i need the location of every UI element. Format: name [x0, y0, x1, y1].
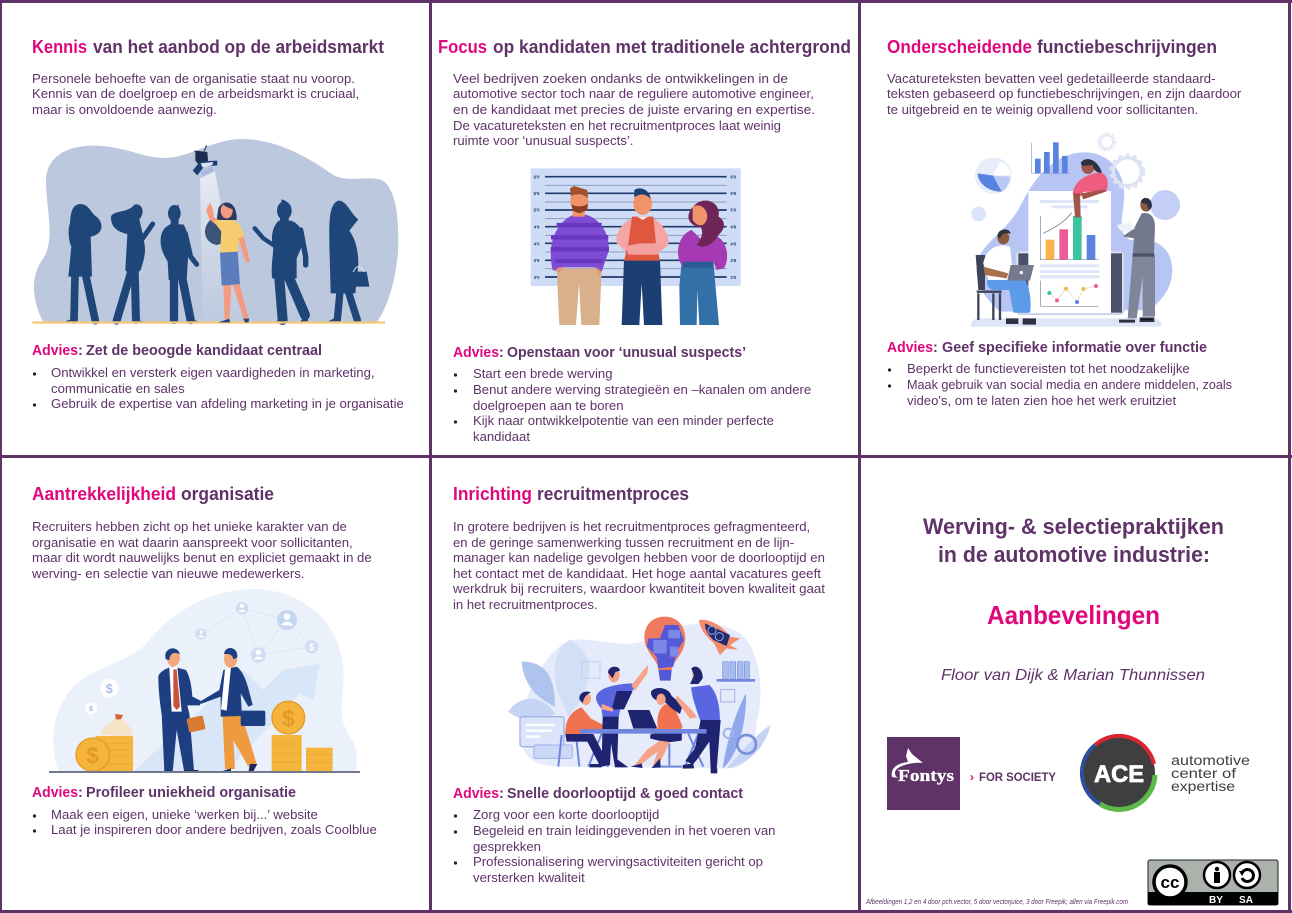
logo: automotive center of expertise: center of — [1171, 765, 1236, 781]
advice list: focus: Benut andere werving strategieën en –kanalen om andere — [473, 382, 811, 397]
advice list: onderscheidende: Beperkt de functievereisten tot het noodzakelijke — [907, 361, 1190, 376]
heading: inrichting — [453, 484, 689, 504]
heading: aantrekkelijkheid: Aantrekkelijkheid — [32, 484, 176, 504]
panel: inrichting recruitmentproces — [452, 484, 825, 885]
heading: onderscheidende — [887, 37, 1217, 57]
advice list: onderscheidende: Maak gebruik van social media en andere middelen, zoals — [907, 377, 1232, 392]
advice heading: kennis: : — [78, 343, 83, 359]
advice heading: focus: Advies — [453, 345, 499, 361]
illustration: team around a table with lightbulb puzzle — [508, 617, 771, 773]
advice list: inrichting: Begeleid en train leidinggevenden in het voeren van — [473, 823, 775, 838]
advice list: onderscheidende — [888, 361, 1232, 408]
text block: inrichting intro: het contact met de kandidaat. Het hoge aantal vacatures geeft — [453, 566, 821, 581]
advice list: kennis: Gebruik de expertise van afdeling marketing in je organisatie — [51, 396, 404, 411]
illustration: police line-up of three people: 4'0 — [534, 241, 540, 246]
logo text: for society: FOR SOCIETY — [979, 770, 1056, 784]
panel: onderscheidende functiebeschrijvingen — [887, 37, 1242, 408]
title — [923, 514, 1224, 567]
illustration: business handshake with coins: $ — [282, 706, 295, 732]
advice heading: aantrekkelijkheid: : — [78, 785, 83, 801]
logo: automotive center of expertise — [1082, 736, 1250, 809]
text block: focus intro: Veel bedrijven zoeken ondanks de ontwikkelingen in de — [453, 71, 788, 86]
illustration: police line-up of three people: 5'6 — [534, 191, 540, 196]
panel: aantrekkelijkheid organisatie — [31, 484, 377, 837]
advice heading: kennis: Advies — [32, 343, 78, 359]
text block: inrichting intro: en de geringe samenwerking tussen recruitment en de lijn- — [453, 535, 794, 550]
logo: fontys: Fontys — [898, 766, 954, 785]
advice heading: inrichting: Snelle doorlooptijd & goed contact — [507, 786, 743, 802]
badge: creative commons by-sa — [1148, 860, 1278, 906]
advice list: inrichting: Zorg voor een korte doorlooptijd — [473, 807, 659, 822]
illustration: police line-up of three people: 5'0 — [730, 208, 737, 213]
text block: focus intro: De vacatureteksten en het recruitmentproces laat weinig — [453, 118, 781, 133]
illustration: police line-up of three people: 6'0 — [534, 174, 540, 179]
text block: onderscheidende intro: teksten gebaseerd op functiebeschrijvingen, en zijn daardoor — [887, 86, 1242, 101]
illustration: police line-up of three people: 6'0 — [730, 174, 737, 179]
text block: aantrekkelijkheid intro: werving- en selectie van nieuwe medewerkers. — [31, 566, 304, 581]
text block: inrichting intro: werkdruk bij recruiters, waardoor kwantiteit boven kwaliteit gaat — [452, 581, 825, 596]
illustration: police line-up of three people: 4'0 — [730, 241, 737, 246]
text block: onderscheidende intro: Vacatureteksten bevatten veel gedetailleerde standaard- — [887, 71, 1216, 86]
title: in de automotive industrie: — [938, 542, 1210, 567]
illustration: business handshake with coins: $ — [86, 742, 99, 768]
panel: title and credits — [865, 514, 1278, 906]
logo: automotive center of expertise: ACE — [1094, 761, 1144, 788]
text block: inrichting intro: in het recruitmentproces. — [453, 597, 598, 612]
badge: creative commons by-sa: BY — [1209, 895, 1223, 906]
heading: onderscheidende: Onderscheidende — [887, 37, 1032, 57]
illustration: business handshake with coins: $ — [89, 704, 94, 713]
heading: aantrekkelijkheid: organisatie — [181, 484, 274, 504]
advice list: inrichting: gesprekken — [473, 839, 541, 854]
badge: creative commons by-sa: cc — [1161, 873, 1179, 892]
advice list: aantrekkelijkheid: Laat je inspireren door andere bedrijven, zoals Coolblue — [51, 822, 377, 837]
title: Werving- & selectiepraktijken — [923, 514, 1224, 539]
advice heading: focus: : — [499, 345, 504, 361]
logo: fontys — [887, 737, 960, 810]
advice list: kennis: Ontwikkel en versterk eigen vaardigheden in marketing, — [51, 365, 375, 380]
illustration: police line-up of three people: 3'6 — [730, 258, 737, 263]
advice heading: focus: Openstaan voor ‘unusual suspects’ — [507, 345, 746, 361]
illustration: team analysing charts on a document — [971, 133, 1180, 327]
text block: kennis intro: maar is onvoldoende aanwezig. — [32, 102, 217, 117]
advice list: onderscheidende: video's, om te laten zien hoe het werk eruitziet — [907, 393, 1176, 408]
advice heading: onderscheidende: Geef specifieke informatie over functie — [942, 340, 1207, 356]
heading: aantrekkelijkheid — [32, 484, 274, 504]
advice list: focus: doelgroepen aan te boren — [473, 398, 624, 413]
advice heading: onderscheidende: : — [933, 340, 938, 356]
text block: inrichting intro: In grotere bedrijven is het recruitmentproces gefragmenteerd, — [453, 519, 810, 534]
badge: creative commons by-sa: SA — [1239, 895, 1253, 906]
advice list: focus: kandidaat — [473, 429, 530, 444]
text block: focus intro: en de kandidaat met precies de juiste ervaring en expertise. — [453, 102, 815, 117]
illustration: police line-up of three people: 3'0 — [534, 275, 540, 280]
advice list: inrichting: versterken kwaliteit — [473, 870, 585, 885]
advice list: inrichting: Professionalisering wervingsactiviteiten gericht op — [473, 854, 763, 869]
illustration: police line-up of three people: 4'6 — [730, 225, 737, 230]
heading: inrichting: Inrichting — [453, 484, 532, 504]
advice list: kennis: communicatie en sales — [51, 381, 185, 396]
illustration: police line-up of three people: 5'6 — [730, 191, 737, 196]
advice heading: onderscheidende: Advies — [887, 340, 933, 356]
illustration: police line-up of three people: 5'0 — [534, 208, 540, 213]
advice list: inrichting — [454, 807, 775, 885]
illustration: business handshake with coins — [49, 589, 360, 773]
heading: kennis: Kennis — [32, 37, 87, 57]
text block: aantrekkelijkheid intro: organisatie en wat daarin aanspreekt voor sollicitanten, — [32, 535, 353, 550]
logo text: for society: › — [970, 770, 974, 784]
advice list: focus: Kijk naar ontwikkelpotentie van een minder perfecte — [473, 413, 774, 428]
illustration: police line-up of three people — [531, 168, 741, 325]
text block: focus intro: ruimte voor ‘unusual suspects’. — [453, 133, 633, 148]
text block: kennis intro: Personele behoefte van de organisatie staat nu voorop. — [32, 71, 355, 86]
advice heading: inrichting: : — [499, 786, 504, 802]
authors: Floor van Dijk & Marian Thunnissen — [941, 667, 1205, 684]
text block: kennis intro: Kennis van de doelgroep en de arbeidsmarkt is cruciaal, — [32, 86, 359, 101]
text block: focus intro: automotive sector toch naar de reguliere automotive engineer, — [453, 86, 814, 101]
panel: focus op kandidaten — [438, 37, 851, 444]
illustration: spotlight on candidate among silhouettes — [32, 139, 398, 324]
logo: automotive center of expertise: expertise — [1171, 778, 1235, 794]
text block: onderscheidende intro: te uitgebreid en te weinig opvallend voor sollicitanten. — [887, 102, 1198, 117]
advice heading: kennis: Zet de beoogde kandidaat centraal — [86, 343, 322, 359]
illustration: police line-up of three people: 4'6 — [534, 225, 540, 230]
heading: onderscheidende: functiebeschrijvingen — [1037, 37, 1217, 57]
heading: focus: Focus — [438, 37, 487, 57]
advice list: aantrekkelijkheid: Maak een eigen, unieke ‘werken bij...’ website — [51, 807, 318, 822]
advice list: focus: Start een brede werving — [473, 366, 613, 381]
text block: kennis intro — [32, 71, 359, 117]
text block: aantrekkelijkheid intro: maar dit wordt nauwelijks benut en expliciet gemaakt in de — [32, 550, 372, 565]
advice heading: inrichting: Advies — [453, 786, 499, 802]
illustration: police line-up of three people: 3'6 — [534, 258, 540, 263]
advice list: focus — [454, 366, 811, 444]
text block: inrichting intro: manager kan nadelige gevolgen hebben voor de doorlooptijd en — [453, 550, 825, 565]
subtitle: aanbevelingen: Aanbevelingen — [987, 600, 1160, 630]
panel: kennis van het aanbod — [32, 37, 404, 411]
illustration: police line-up of three people: 3'0 — [730, 275, 737, 280]
heading: focus: op kandidaten met traditionele achtergrond — [493, 37, 851, 57]
text block: aantrekkelijkheid intro — [31, 519, 372, 581]
image credits: Afbeeldingen 1,2 en 4 door pch.vector, 5 door vectorjuice, 3 door Freepik; allen via Freepik.com — [865, 899, 1128, 906]
heading: kennis: van het aanbod op de arbeidsmarkt — [93, 37, 384, 57]
advice heading: aantrekkelijkheid: Profileer uniekheid organisatie — [86, 785, 296, 801]
text block: focus intro — [453, 71, 815, 148]
text block: aantrekkelijkheid intro: Recruiters hebben zicht op het unieke karakter van de — [32, 519, 347, 534]
advice heading: aantrekkelijkheid: Advies — [32, 785, 78, 801]
heading: inrichting: recruitmentproces — [537, 484, 689, 504]
text block: onderscheidende intro — [887, 71, 1242, 117]
illustration: business handshake with coins: $ — [106, 682, 113, 696]
text block: inrichting intro — [452, 519, 825, 612]
logo: automotive center of expertise: automotive — [1171, 752, 1250, 768]
illustration: business handshake with coins: $ — [309, 643, 315, 654]
advice list: aantrekkelijkheid — [33, 807, 377, 837]
advice list: kennis — [33, 365, 404, 411]
